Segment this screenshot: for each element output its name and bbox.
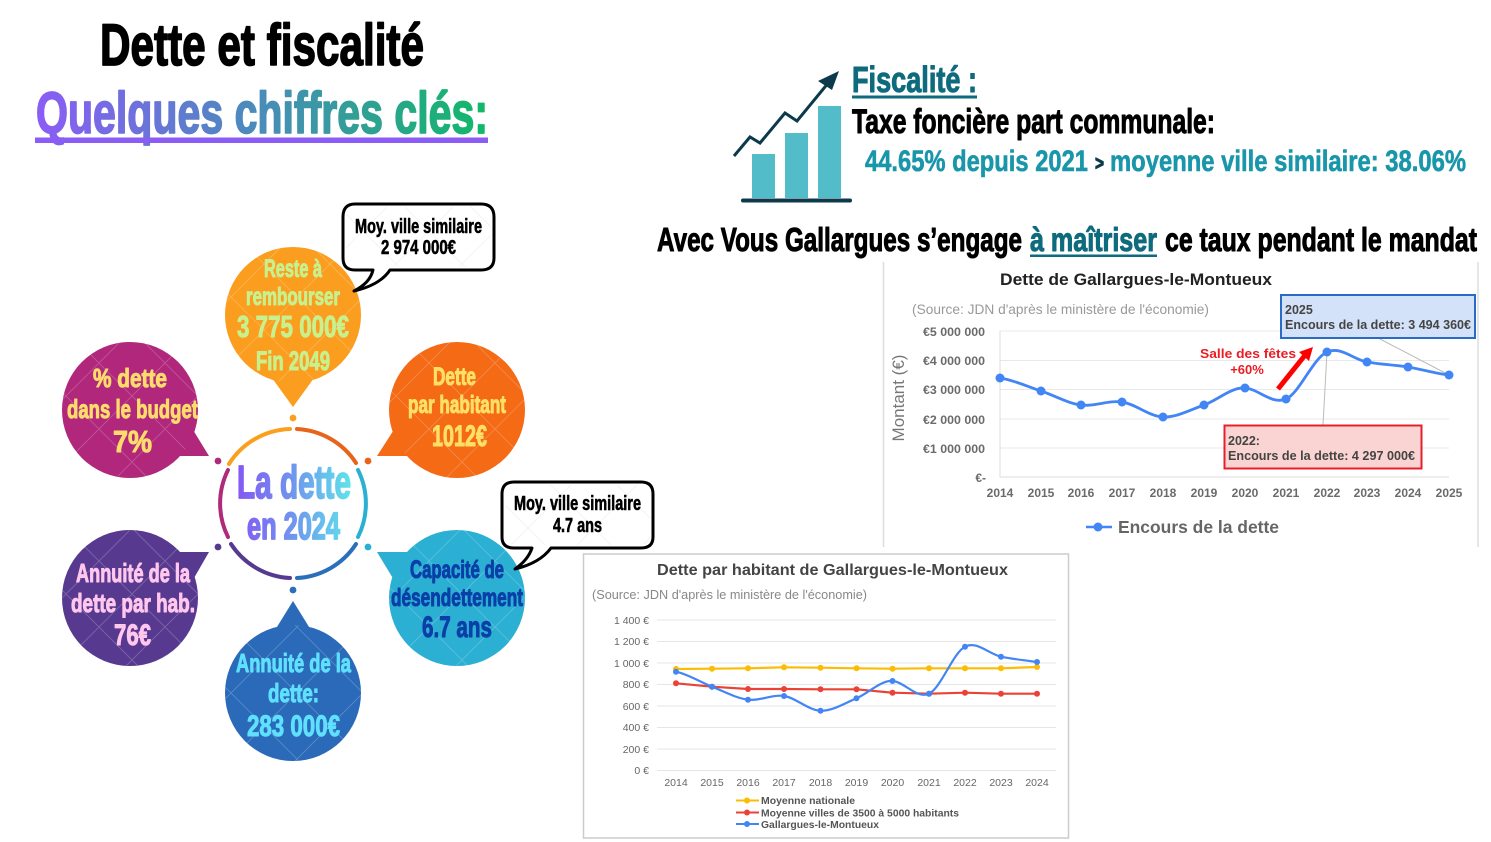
line: encours de la dette bbox=[996, 348, 1454, 422]
x axis labels: 2016 bbox=[1068, 486, 1095, 500]
bubble: dette par habitant: Dette bbox=[433, 363, 476, 391]
callout: moyenne ville similaire, désendettement: 4.7 ans bbox=[553, 515, 602, 537]
bubble: dette par habitant: 1012€ bbox=[432, 420, 487, 453]
bubble: annuité de la dette par habitant bbox=[62, 530, 209, 666]
callout: moyenne ville similaire, reste à rembourser: Moy. ville similaire bbox=[355, 216, 482, 238]
callout: 2022: Encours de la dette: 4 297 000€ bbox=[1228, 449, 1415, 463]
y axis labels: €2 000 000 bbox=[923, 413, 985, 427]
chart source: (Source: JDN d'après le ministère de l'économie) bbox=[912, 301, 1209, 317]
leader lines bbox=[1323, 339, 1449, 425]
text: taux comparé à la moyenne bbox=[865, 145, 1466, 178]
y axis labels: €3 000 000 bbox=[923, 383, 985, 397]
chart panel: dette par habitant bbox=[584, 554, 1068, 838]
y axis labels: 600 € bbox=[623, 701, 649, 713]
central ring: la dette en 2024: La dette bbox=[237, 456, 351, 508]
x axis labels: 2014 bbox=[664, 777, 688, 789]
text: engagement bbox=[657, 221, 1477, 258]
bubble: % dette dans le budget: % dette bbox=[93, 363, 167, 393]
text: engagement: à maîtriser bbox=[1030, 221, 1157, 258]
arrow: red increase bbox=[1278, 347, 1313, 389]
chart title: Dette de Gallargues-le-Montueux bbox=[1000, 271, 1273, 289]
x axis labels: 2015 bbox=[1028, 486, 1055, 500]
x axis labels bbox=[987, 486, 1463, 500]
x axis labels: 2022 bbox=[1314, 486, 1341, 500]
callout: 2025 bbox=[1281, 295, 1475, 338]
callout: moyenne ville similaire, reste à rembourser: 2 974 000€ bbox=[381, 237, 456, 259]
bubble: capacité de désendettement bbox=[377, 530, 525, 666]
y axis labels: 800 € bbox=[623, 679, 649, 691]
heading: fiscalité: Fiscalité : bbox=[852, 59, 977, 100]
y axis labels bbox=[614, 615, 649, 777]
central ring: la dette en 2024 bbox=[215, 415, 371, 593]
text: taux comparé à la moyenne: > bbox=[1095, 153, 1104, 175]
callout: moyenne ville similaire, reste à rembourser bbox=[343, 204, 494, 291]
callout: 2025: 2025 bbox=[1285, 303, 1313, 317]
x axis labels: 2021 bbox=[917, 777, 941, 789]
x axis labels: 2019 bbox=[845, 777, 868, 789]
x axis labels: 2023 bbox=[1354, 486, 1381, 500]
chart legend bbox=[736, 795, 959, 831]
y axis title: Montant (€) bbox=[889, 355, 908, 441]
callout: moyenne ville similaire, désendettement: Moy. ville similaire bbox=[514, 493, 641, 515]
bubble: capacité de désendettement: Capacité de bbox=[410, 556, 504, 584]
y axis labels: €- bbox=[975, 471, 986, 485]
y axis labels: €1 000 000 bbox=[923, 442, 985, 456]
y axis labels: 0 € bbox=[634, 765, 649, 777]
bubble: capacité de désendettement: 6.7 ans bbox=[422, 611, 492, 644]
x axis labels: 2024 bbox=[1395, 486, 1422, 500]
bubble: reste à rembourser bbox=[225, 247, 361, 407]
bubble: % dette dans le budget: 7% bbox=[113, 424, 152, 459]
chart title: Dette par habitant de Gallargues-le-Montueux bbox=[657, 562, 1008, 579]
chart panel: dette de Gallargues-le-Montueux bbox=[884, 262, 1478, 547]
chart legend: Gallargues-le-Montueux bbox=[761, 819, 879, 831]
bubble: annuité de la dette: dette: bbox=[268, 678, 319, 708]
bubble: annuité de la dette: Annuité de la bbox=[236, 648, 351, 678]
bubble: annuité de la dette par habitant: dette par hab. bbox=[71, 588, 195, 618]
callout: 2025: Encours de la dette: 3 494 360€ bbox=[1285, 318, 1471, 332]
chart legend: Moyenne nationale bbox=[761, 795, 855, 807]
line: Gallargues-le-Montueux bbox=[673, 644, 1040, 714]
line: moyenne villes bbox=[673, 680, 1040, 697]
line: moyenne nationale bbox=[673, 664, 1040, 672]
bubble: annuité de la dette: 283 000€ bbox=[247, 710, 340, 743]
y axis labels: 1 000 € bbox=[614, 658, 649, 670]
y axis labels: 1 400 € bbox=[614, 615, 649, 627]
chart legend: Moyenne villes de 3500 à 5000 habitants bbox=[761, 808, 959, 820]
bubble: annuité de la dette bbox=[225, 601, 361, 761]
subtitle: quelques chiffres clés: Quelques chiffres clés: bbox=[36, 81, 488, 146]
bubble: dette par habitant: par habitant bbox=[408, 391, 506, 419]
chart legend: Encours de la dette bbox=[1118, 517, 1279, 537]
chart source: (Source: JDN d'après le ministère de l'économie) bbox=[592, 588, 867, 602]
icon: rising bar chart with arrow bbox=[734, 71, 852, 202]
bubble: annuité de la dette par habitant: Annuité de la bbox=[76, 558, 190, 588]
bubble: reste à rembourser: Fin 2049 bbox=[256, 346, 330, 376]
x axis labels: 2017 bbox=[772, 777, 796, 789]
y axis labels: €4 000 000 bbox=[923, 354, 985, 368]
x axis labels: 2019 bbox=[1191, 486, 1218, 500]
y axis labels: 1 200 € bbox=[614, 636, 649, 648]
x axis labels: 2018 bbox=[809, 777, 832, 789]
bubble: % dette dans le budget: dans le budget bbox=[67, 394, 198, 424]
bubble: annuité de la dette par habitant: 76€ bbox=[114, 619, 151, 652]
bubble: reste à rembourser: rembourser bbox=[246, 283, 340, 311]
x axis labels: 2020 bbox=[881, 777, 904, 789]
x axis labels: 2015 bbox=[700, 777, 724, 789]
callout: 2022 bbox=[1224, 426, 1422, 468]
callout: 2022: 2022: bbox=[1228, 434, 1260, 448]
y axis labels: 400 € bbox=[623, 722, 649, 734]
text: taxe foncière part communale: Taxe foncière part communale: bbox=[852, 103, 1215, 141]
central ring: la dette en 2024: en 2024 bbox=[247, 506, 340, 548]
x axis labels: 2025 bbox=[1436, 486, 1463, 500]
y axis labels: €5 000 000 bbox=[923, 325, 985, 339]
bubble: capacité de désendettement: désendettement bbox=[391, 584, 523, 612]
annotation: salle des fêtes: Salle des fêtes bbox=[1200, 346, 1296, 361]
bubble: % dette dans le budget bbox=[62, 342, 209, 478]
x axis labels bbox=[664, 777, 1049, 789]
x axis labels: 2018 bbox=[1150, 486, 1177, 500]
annotation: salle des fêtes bbox=[1200, 346, 1296, 377]
x axis labels: 2022 bbox=[953, 777, 977, 789]
bubble: reste à rembourser: Reste à bbox=[264, 255, 322, 283]
x axis labels: 2020 bbox=[1232, 486, 1259, 500]
x axis labels: 2024 bbox=[1025, 777, 1049, 789]
y axis labels: 200 € bbox=[623, 744, 649, 756]
x axis labels: 2021 bbox=[1273, 486, 1300, 500]
text: engagement: Avec Vous Gallargues s’engage bbox=[657, 221, 1022, 258]
text: taux comparé à la moyenne: 44.65% depuis 2021 bbox=[865, 145, 1088, 178]
annotation: salle des fêtes: +60% bbox=[1230, 362, 1264, 377]
callout: moyenne ville similaire, désendettement bbox=[502, 482, 653, 569]
bubble: dette par habitant bbox=[377, 342, 525, 478]
x axis labels: 2014 bbox=[987, 486, 1014, 500]
x axis labels: 2023 bbox=[989, 777, 1013, 789]
x axis labels: 2016 bbox=[736, 777, 760, 789]
title: Dette et fiscalité bbox=[100, 13, 424, 78]
x axis labels: 2017 bbox=[1109, 486, 1136, 500]
y axis labels bbox=[923, 325, 986, 485]
bubble: reste à rembourser: 3 775 000€ bbox=[237, 309, 349, 344]
